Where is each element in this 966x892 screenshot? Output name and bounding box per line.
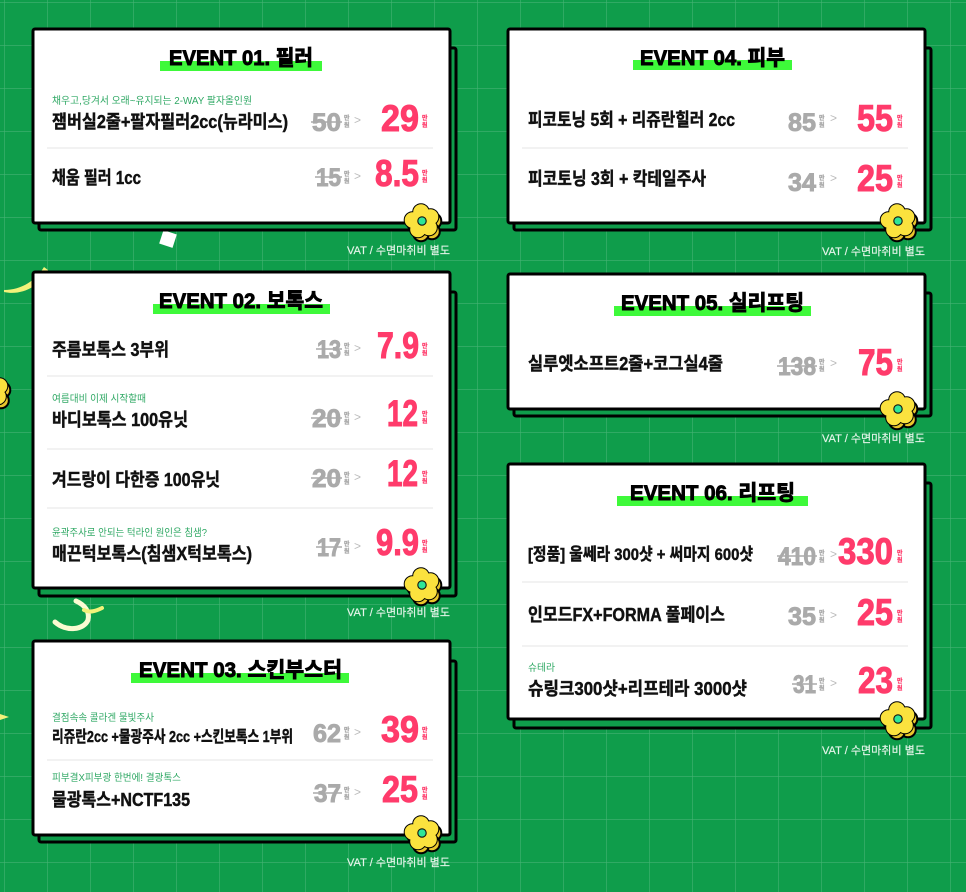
row: pico toning 3: 피코토닝 3회 + 칵테일주사 [528, 169, 706, 189]
row: wrinkle botox: 주름보톡스 3부위 [52, 340, 169, 360]
row: jambers silk: 29 [381, 98, 419, 139]
row: jaw botox: 만 [344, 540, 350, 548]
row: inmode: 인모드FX+FORMA 풀페이스 [528, 605, 725, 625]
row: inmode: 만 [819, 609, 825, 617]
row: shurink: 원 [819, 684, 825, 692]
row: chaeum filler: 원 [344, 177, 350, 185]
row: jaw botox: > [354, 539, 361, 553]
icon: flower 5 [881, 392, 917, 429]
note: vat 1: VAT / 수면마취비 별도 [347, 244, 450, 257]
row: body botox: 원 [422, 417, 428, 425]
row: jaw botox [52, 522, 428, 564]
row: jambers silk: 만 [344, 114, 350, 122]
row: ulthera: [정품] 울쎄라 300샷 + 써마지 600샷 [528, 545, 753, 564]
row: glow botox: 만 [344, 786, 350, 794]
row: shurink [528, 660, 903, 701]
row: rejuran combo: 리쥬란2cc +물광주사 2cc +스킨보톡스 1부위 [52, 728, 293, 746]
row: jaw botox: 원 [422, 546, 428, 554]
row: pico toning 3: 만 [897, 174, 903, 182]
row: silhouette soft: > [830, 356, 837, 370]
row: ulthera: 원 [897, 556, 903, 564]
row: jaw botox: 17 [317, 534, 341, 562]
row: shurink: 만 [897, 677, 903, 685]
row: body botox: 만 [344, 411, 350, 419]
row: shurink: 만 [819, 677, 825, 685]
row: jambers silk: 채우고,당겨서 오래~유지되는 2-WAY 팔자올인원 [52, 95, 252, 107]
row: wrinkle botox: 만 [422, 342, 428, 350]
row: rejuran combo: 만 [344, 726, 350, 734]
row: jambers silk: 원 [422, 121, 428, 129]
row: jaw botox: 원 [344, 547, 350, 555]
row: ulthera: 330 [838, 531, 893, 572]
row: hyperhidrosis botox: 원 [344, 478, 350, 486]
row: rejuran combo: 만 [422, 726, 428, 734]
note: vat 6: VAT / 수면마취비 별도 [822, 744, 925, 757]
row: chaeum filler: 채움 필러 1cc [52, 168, 141, 188]
partial flower at left edge [0, 373, 10, 410]
icon: flower 1 [405, 204, 441, 241]
panel: event 03 skin booster [33, 641, 456, 842]
row: chaeum filler: > [354, 169, 361, 183]
row: silhouette soft: 실루엣소프트2줄+코그실4줄 [528, 354, 723, 374]
row: jaw botox: 9.9 [376, 522, 419, 563]
row: hyperhidrosis botox: 만 [344, 471, 350, 479]
row: silhouette soft: 75 [858, 342, 893, 383]
row: inmode: > [830, 608, 837, 622]
row: chaeum filler: 만 [422, 169, 428, 177]
row: body botox: > [354, 410, 361, 424]
row: chaeum filler: 15 [316, 164, 341, 192]
row: pico toning 3: 만 [819, 174, 825, 182]
row: ulthera: 원 [819, 556, 825, 564]
icon: flower 3 [405, 816, 441, 853]
row: shurink: 원 [897, 684, 903, 692]
row: body botox: 원 [344, 418, 350, 426]
row: glow botox: 물광톡스+NCTF135 [52, 790, 190, 810]
row: jambers silk: > [354, 113, 361, 127]
row: rejuran combo: 39 [381, 709, 419, 750]
row: ulthera: 만 [819, 549, 825, 557]
panel: event 04 skin [508, 29, 931, 230]
row: silhouette soft [528, 342, 903, 383]
row: rejuran combo: 결점속속 콜라겐 물빛주사 [52, 712, 154, 724]
row: pico toning 3: 34 [788, 169, 816, 197]
row: hyperhidrosis botox: 20 [312, 465, 341, 493]
row: wrinkle botox: 원 [422, 349, 428, 357]
row: rejuran combo: > [354, 725, 361, 739]
row: silhouette soft: 만 [819, 358, 825, 366]
row: wrinkle botox: 13 [317, 336, 341, 364]
row: hyperhidrosis botox: 겨드랑이 다한증 100유닛 [52, 470, 220, 490]
row: shurink: > [830, 676, 837, 690]
row: pico toning 5: 만 [897, 114, 903, 122]
row: pico toning 5: 85 [788, 109, 816, 137]
row: chaeum filler: 8.5 [375, 153, 419, 194]
row: hyperhidrosis botox: 12 [387, 453, 418, 494]
panel: event 02 botox [33, 272, 456, 596]
row: shurink: 31 [793, 671, 816, 699]
row: body botox: 여름대비 이제 시작할때 [52, 393, 146, 405]
row: jaw botox: 윤곽주사로 안되는 턱라인 원인은 침샘? [52, 527, 207, 539]
row: glow botox: 원 [344, 793, 350, 801]
row: jambers silk: 원 [344, 121, 350, 129]
row: hyperhidrosis botox: 원 [422, 477, 428, 485]
row: chaeum filler: 만 [344, 170, 350, 178]
row: silhouette soft: 원 [897, 365, 903, 373]
row: wrinkle botox [52, 325, 428, 366]
row: inmode: 35 [788, 603, 816, 631]
row: wrinkle botox: 원 [344, 349, 350, 357]
row: inmode: 25 [857, 592, 893, 633]
row: shurink: 슈링크300샷+리프테라 3000샷 [528, 679, 747, 699]
row: pico toning 5: > [830, 111, 837, 125]
row: pico toning 5 [528, 98, 903, 139]
row: hyperhidrosis botox: 만 [422, 470, 428, 478]
row: pico toning 5: 피코토닝 5회 + 리쥬란힐러 2cc [528, 110, 735, 130]
row: pico toning 3: 25 [857, 158, 893, 199]
row: shurink: 슈테라 [528, 662, 555, 674]
row: inmode: 원 [819, 616, 825, 624]
row: pico toning 3: 원 [897, 181, 903, 189]
row: glow botox: 원 [422, 793, 428, 801]
confetti: white square [159, 230, 177, 248]
row: silhouette soft: 원 [819, 365, 825, 373]
note: vat 3: VAT / 수면마취비 별도 [347, 856, 450, 869]
panel: event 01 filler [33, 29, 456, 230]
row: jaw botox: 만 [422, 539, 428, 547]
note: vat 2: VAT / 수면마취비 별도 [347, 606, 450, 619]
row: rejuran combo: 원 [422, 733, 428, 741]
row: silhouette soft: 138 [778, 353, 816, 381]
row: pico toning 5: 원 [897, 121, 903, 129]
row: ulthera [528, 531, 903, 572]
row: jambers silk: 50 [312, 109, 341, 137]
row: pico toning 3: > [830, 171, 837, 185]
row: chaeum filler [52, 153, 428, 194]
panel: event 06 lifting [508, 464, 931, 728]
row: rejuran combo: 원 [344, 733, 350, 741]
row: silhouette soft: 만 [897, 358, 903, 366]
row: jambers silk [52, 95, 428, 139]
row: ulthera: 만 [897, 549, 903, 557]
row: glow botox: 25 [382, 769, 418, 810]
row: inmode [528, 592, 903, 633]
row: ulthera: > [830, 547, 837, 561]
row: jaw botox: 매끈턱보톡스(침샘X턱보톡스) [52, 544, 252, 564]
row: glow botox: > [354, 785, 361, 799]
row: body botox [52, 393, 428, 434]
heading: event 03: EVENT 03. 스킨부스터 [139, 659, 342, 682]
heading: event 02: EVENT 02. 보톡스 [159, 290, 323, 313]
row: jambers silk: 잼버실2줄+팔자필러2cc(뉴라미스) [52, 112, 288, 132]
icon: flower 4 [881, 204, 917, 241]
row: wrinkle botox: 만 [344, 342, 350, 350]
row: body botox: 만 [422, 410, 428, 418]
heading: event 05: EVENT 05. 실리프팅 [621, 292, 804, 315]
row: ulthera: 410 [778, 543, 816, 571]
confetti: yellow ribbon [55, 601, 102, 629]
row: rejuran combo [52, 709, 428, 750]
panel: event 05 thread lift [508, 274, 931, 416]
heading: event 01: EVENT 01. 필러 [169, 47, 313, 70]
row: hyperhidrosis botox [52, 453, 428, 494]
row: pico toning 5: 원 [819, 121, 825, 129]
row: wrinkle botox: 7.9 [377, 325, 419, 366]
row: glow botox: 피부결X피부광 한번에! 결광톡스 [52, 772, 181, 784]
confetti: small yellow streak [0, 714, 9, 720]
row: jambers silk: 만 [422, 114, 428, 122]
icon: flower 2 [405, 568, 441, 605]
row: hyperhidrosis botox: > [354, 470, 361, 484]
row: body botox: 바디보톡스 100유닛 [52, 410, 188, 430]
row: pico toning 3: 원 [819, 181, 825, 189]
note: vat 5: VAT / 수면마취비 별도 [822, 432, 925, 445]
row: inmode: 원 [897, 616, 903, 624]
row: pico toning 3 [528, 158, 903, 199]
row: glow botox: 만 [422, 786, 428, 794]
row: glow botox: 37 [314, 780, 341, 808]
row: shurink: 23 [858, 660, 893, 701]
row: body botox: 20 [312, 405, 341, 433]
row: pico toning 5: 55 [857, 98, 893, 139]
note: vat 4: VAT / 수면마취비 별도 [822, 245, 925, 258]
confetti: yellow streak [4, 267, 48, 293]
row: inmode: 만 [897, 609, 903, 617]
heading: event 06: EVENT 06. 리프팅 [630, 482, 795, 505]
row: body botox: 12 [387, 393, 418, 434]
heading: event 04: EVENT 04. 피부 [640, 47, 785, 70]
row: chaeum filler: 원 [422, 176, 428, 184]
icon: flower 6 [881, 702, 917, 739]
row: glow botox [52, 769, 428, 810]
row: rejuran combo: 62 [313, 720, 341, 748]
row: pico toning 5: 만 [819, 114, 825, 122]
row: wrinkle botox: > [354, 341, 361, 355]
